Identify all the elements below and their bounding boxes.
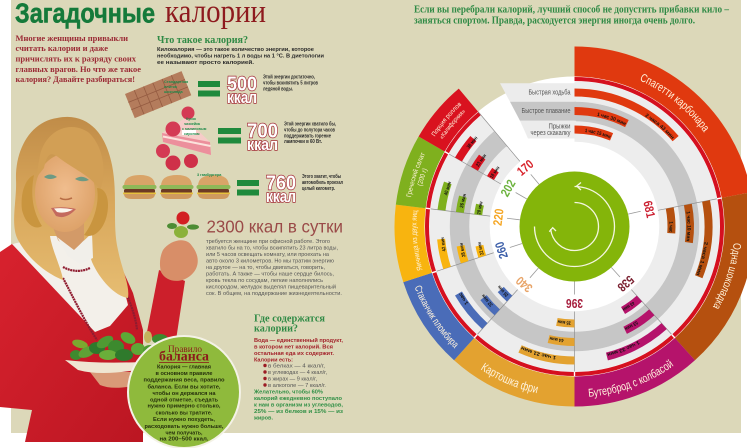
rule heading: баланса [159, 350, 209, 364]
icon: chocolate bar [125, 71, 191, 118]
bar time labels: 44 мин [550, 336, 564, 342]
bar time labels: 40 мин [444, 182, 452, 196]
right header text: заняться спортом. Правда, расходуется энергия иногда очень долго. [414, 16, 695, 27]
bars: spaghetti [440, 92, 708, 360]
bar time labels: 53 мин [624, 321, 638, 330]
segment labels: Греческий салат [406, 152, 425, 197]
note: 500 kcal: чтобы вскипятить 5 литров [263, 79, 318, 86]
bar time labels: 43 мин [622, 302, 634, 311]
calorie values: 220 [491, 208, 507, 226]
photo: woman with salad [0, 117, 199, 442]
calorie values: 681 [640, 199, 658, 219]
calories text block: в алкоголе — 7 ккал/г. [268, 383, 326, 389]
heading: what is a calorie: Что такое калория? [157, 34, 248, 46]
bars: sandwich [385, 37, 747, 416]
bar time labels: 20 мин [476, 202, 483, 214]
calorie value ticks [507, 174, 641, 294]
calories text block: Желательно, чтобы 60% [253, 388, 323, 396]
heading: 2300 kcal per day: 2300 ккал в сутки [206, 217, 343, 237]
intro text: главных врагов. Но что же такое [16, 65, 141, 74]
bar time labels: 38 мин [466, 136, 478, 148]
activity bands [440, 92, 710, 362]
daily energy text: или 5 часов освещать комнату, или проехать на [206, 252, 329, 258]
daily energy text: кислородом, желудок выделял пищеварительный [206, 284, 336, 290]
icon: raspberry cake [156, 106, 211, 170]
plate [65, 360, 140, 373]
icon: three hamburgers: 3 гамбургера [197, 173, 222, 177]
equals sign 3 [237, 180, 259, 196]
bar time labels: 1 час [460, 292, 468, 305]
calories text block: Вода — единственный продукт, [254, 337, 344, 344]
calories text block: в жирах — 9 ккал/г, [268, 376, 317, 382]
blouse [12, 234, 128, 332]
heading: where calories are: калории? [254, 323, 298, 335]
hand under plate [90, 372, 134, 388]
bar time labels: 18 мин [490, 166, 500, 178]
mouth [51, 207, 76, 217]
white disc [424, 76, 724, 376]
value: 500 kcal [227, 74, 257, 107]
note: 500 kcal: Этой энергии достаточно, [263, 74, 315, 81]
center arrows [534, 182, 614, 266]
bars: fries [440, 92, 708, 360]
kilocalorie definition: необходимо, чтобы нагреть 1 л воды на 1 °С. В диетологии [157, 52, 324, 60]
kilocalorie definition: ее называют просто калорией. [157, 59, 255, 66]
rule heading: Правило [168, 345, 202, 355]
segment labels: Яичница из двух яиц [412, 210, 422, 270]
bar time labels: 2 часа 1 мин [696, 242, 708, 276]
value: 500 kcal: 500 [227, 74, 257, 96]
right header text: Если вы перебрали калорий, лучший способ не допустить прибавки кило – [414, 5, 730, 16]
fork with tomato and greens [167, 212, 199, 238]
rule text: чтобы он держался на [152, 390, 217, 397]
calories text block: в углеводах — 4 ккал/г, [268, 370, 327, 376]
value: 700 kcal: 700 [247, 120, 278, 142]
daily energy text: хватило бы на то, чтобы вскипятить 23 литра воды, [206, 246, 338, 252]
collar [57, 233, 93, 264]
segment labels: Бутерброд с колбасой [588, 359, 674, 399]
bars: salad [425, 77, 724, 376]
intro text [16, 34, 141, 84]
equals sign 1 [198, 81, 220, 96]
segment labels: Спагетти карбонара [640, 74, 708, 132]
bar time labels [441, 112, 708, 360]
nose [60, 198, 72, 200]
value: 700 kcal [247, 120, 278, 154]
calorie values: 340 [513, 273, 535, 295]
icon: chocolate bar: Стандартная [164, 80, 188, 84]
right header text [414, 5, 730, 27]
hair back [14, 117, 128, 298]
activity legend [500, 83, 576, 138]
daily energy text [206, 238, 342, 297]
activity legend: Быстрое плавание [522, 108, 571, 115]
red ring [427, 79, 722, 374]
bar time labels: 1 час 21 мин [521, 346, 556, 360]
red ring gaps [426, 152, 722, 376]
calorie values: 202 [498, 177, 519, 199]
hair bangs [36, 127, 104, 190]
bar time labels: 1 час 30 мин [597, 112, 626, 126]
bar time labels: 22 мин [478, 242, 484, 256]
daily energy text: на другое — на то, чтобы двигаться, говорить, [206, 265, 325, 271]
note: 500 kcal: ледяной воды. [263, 86, 293, 93]
calorie values: 538 [615, 272, 637, 294]
value: 760 kcal: ккал [266, 188, 296, 206]
heading: where calories are [254, 313, 325, 335]
rule text: Если нужно похудеть, [153, 417, 216, 423]
rule text: одной отметке, съедать [150, 397, 219, 404]
bar time labels: 32 мин [482, 294, 493, 307]
bars: chocolate [417, 69, 732, 384]
calories text block: в белках — 4 ккал/г, [268, 364, 325, 370]
icon: chocolate bar: шоколада [164, 90, 183, 94]
equals sign 2 [218, 128, 241, 144]
note: 700 kcal: Этой энергии хватило бы, [284, 120, 336, 128]
rule text: чем получать, [166, 431, 203, 437]
rule text: Калория — главная [157, 365, 211, 371]
bar time labels: 28 мин [460, 243, 466, 257]
value: 700 kcal: ккал [247, 136, 278, 154]
segment labels: Стаканчик пломбира [415, 286, 458, 348]
bar time labels: 1 час 10 мин [686, 212, 691, 242]
sweater [0, 238, 143, 442]
panel: balance rule [128, 336, 240, 448]
value: 500 kcal: ккал [227, 89, 257, 107]
activity legend: через скакалку [530, 130, 571, 137]
rule text: поддержания веса, правило [144, 378, 225, 384]
value: 760 kcal: 760 [266, 172, 296, 194]
segment labels: Порция роллов [431, 102, 462, 136]
value: 760 kcal [266, 172, 296, 206]
neck [48, 215, 84, 254]
calorie values: 260 [492, 240, 511, 260]
icon: raspberry cake: сиропом [184, 132, 200, 136]
intro text: Многие женщины привыкли [16, 34, 128, 43]
title [15, 0, 266, 30]
note: 700 kcal: лампочки в 60 Вт. [284, 139, 323, 145]
segment labels: Картошка фри [480, 362, 538, 394]
activity legend: Прыжки [548, 124, 571, 130]
icon: raspberry cake: с малиновым [182, 127, 207, 131]
heading: where calories are: Где содержатся [254, 313, 325, 325]
note: 760 kcal: Этого хватит, чтобы [302, 173, 341, 180]
rule text: на 200–500 ккал. [160, 437, 209, 443]
calories text block [253, 337, 344, 422]
daily energy text: кровь текла по сосудам, легкие наполнялись [206, 278, 323, 284]
hair side strand [22, 175, 108, 236]
rule text [144, 365, 225, 443]
hand [160, 240, 198, 281]
raised sleeve [147, 270, 185, 346]
rule text: расходовать нужно больше, [144, 423, 224, 430]
bar time labels: 2 часа 43 мин [645, 114, 674, 139]
bar time labels: 35 мин [558, 320, 571, 325]
calorie values: 396 [566, 296, 583, 310]
daily energy text: авто около 3 километров. Но мы тратим энергию [206, 258, 334, 264]
bars: ice cream [385, 37, 747, 416]
kilocalorie definition [157, 47, 324, 66]
segment labels: «Калифорния» [440, 110, 465, 138]
radial chart [394, 46, 747, 406]
rule text: сколько вы тратите. [156, 410, 213, 416]
calories text block: Калории есть: [254, 358, 293, 364]
calories text block: калорий ежедневно поступало [254, 395, 343, 402]
icon: raspberry cake: Кусок [186, 117, 196, 121]
green center circle [520, 172, 630, 282]
note: 760 kcal [302, 173, 343, 192]
face [35, 154, 95, 232]
segment labels: Одна шоколадка [712, 244, 741, 309]
icon: raspberry cake: чизкейка [184, 122, 201, 126]
activity legend: Быстрая ходьба [528, 88, 571, 96]
bar time labels: 1 час 33 мин [607, 340, 640, 356]
note: 760 kcal: автомобиль проехал [302, 179, 343, 186]
calories text block: остальная еда их содержит. [254, 351, 335, 357]
segment dividers [426, 112, 722, 377]
bar time labels: 26 мин [460, 194, 466, 208]
kilocalorie definition: Килокалория — это такое количество энергии, которое [157, 47, 314, 53]
note: 500 kcal [263, 74, 318, 93]
daily energy text: сок. В общем, на поддержание жизнедеятельности. [206, 291, 342, 297]
calorie values [491, 157, 658, 310]
segment labels [406, 74, 741, 399]
calories text block: к нам в организм из углеводов, [254, 402, 344, 408]
rule text: в основном правиле [156, 371, 212, 377]
note: 700 kcal [284, 120, 336, 145]
bar time labels: 26 мин [498, 285, 508, 297]
bar time labels: 1 час [669, 222, 673, 232]
note: 700 kcal: поддерживать горение [284, 134, 331, 140]
daily energy text: требуется женщине при офисной работе. Этого [206, 238, 330, 245]
rule text: баланса. Если вы хотите, [148, 383, 221, 390]
rule text: нужно примерно столько, [148, 404, 221, 410]
intro text: калория? Давайте разбираться! [16, 75, 135, 84]
bars: eggs [406, 58, 743, 395]
daily energy text: работать. А также — чтобы наше сердце билось, [206, 272, 334, 278]
calorie values: 170 [514, 157, 536, 179]
calories text block: в котором нет калорий. Вся [254, 344, 333, 350]
salad [70, 330, 168, 361]
calories text block: 25% — из белков и 15% — из [254, 408, 343, 415]
bar time labels: 23 мин [476, 154, 486, 167]
eyes [44, 174, 89, 181]
bar time labels: 1 час 15 мин [585, 128, 611, 138]
note: 700 kcal: чтобы до полутора часов [284, 126, 335, 134]
food segments ring [341, 0, 747, 448]
intro text: считать калории и даже [16, 44, 108, 53]
icon: chocolate bar: плитка [164, 85, 178, 89]
intro text: причислять их к разряду своих [16, 54, 137, 64]
segment labels: (200 г) [417, 168, 428, 186]
necklace [63, 267, 137, 340]
bars: rolls [391, 43, 747, 410]
icon: three hamburgers [122, 173, 230, 199]
calories text block: жиров. [253, 416, 274, 422]
note: 760 kcal: целый километр. [302, 185, 335, 192]
bar time labels: 42 мин [441, 238, 446, 252]
